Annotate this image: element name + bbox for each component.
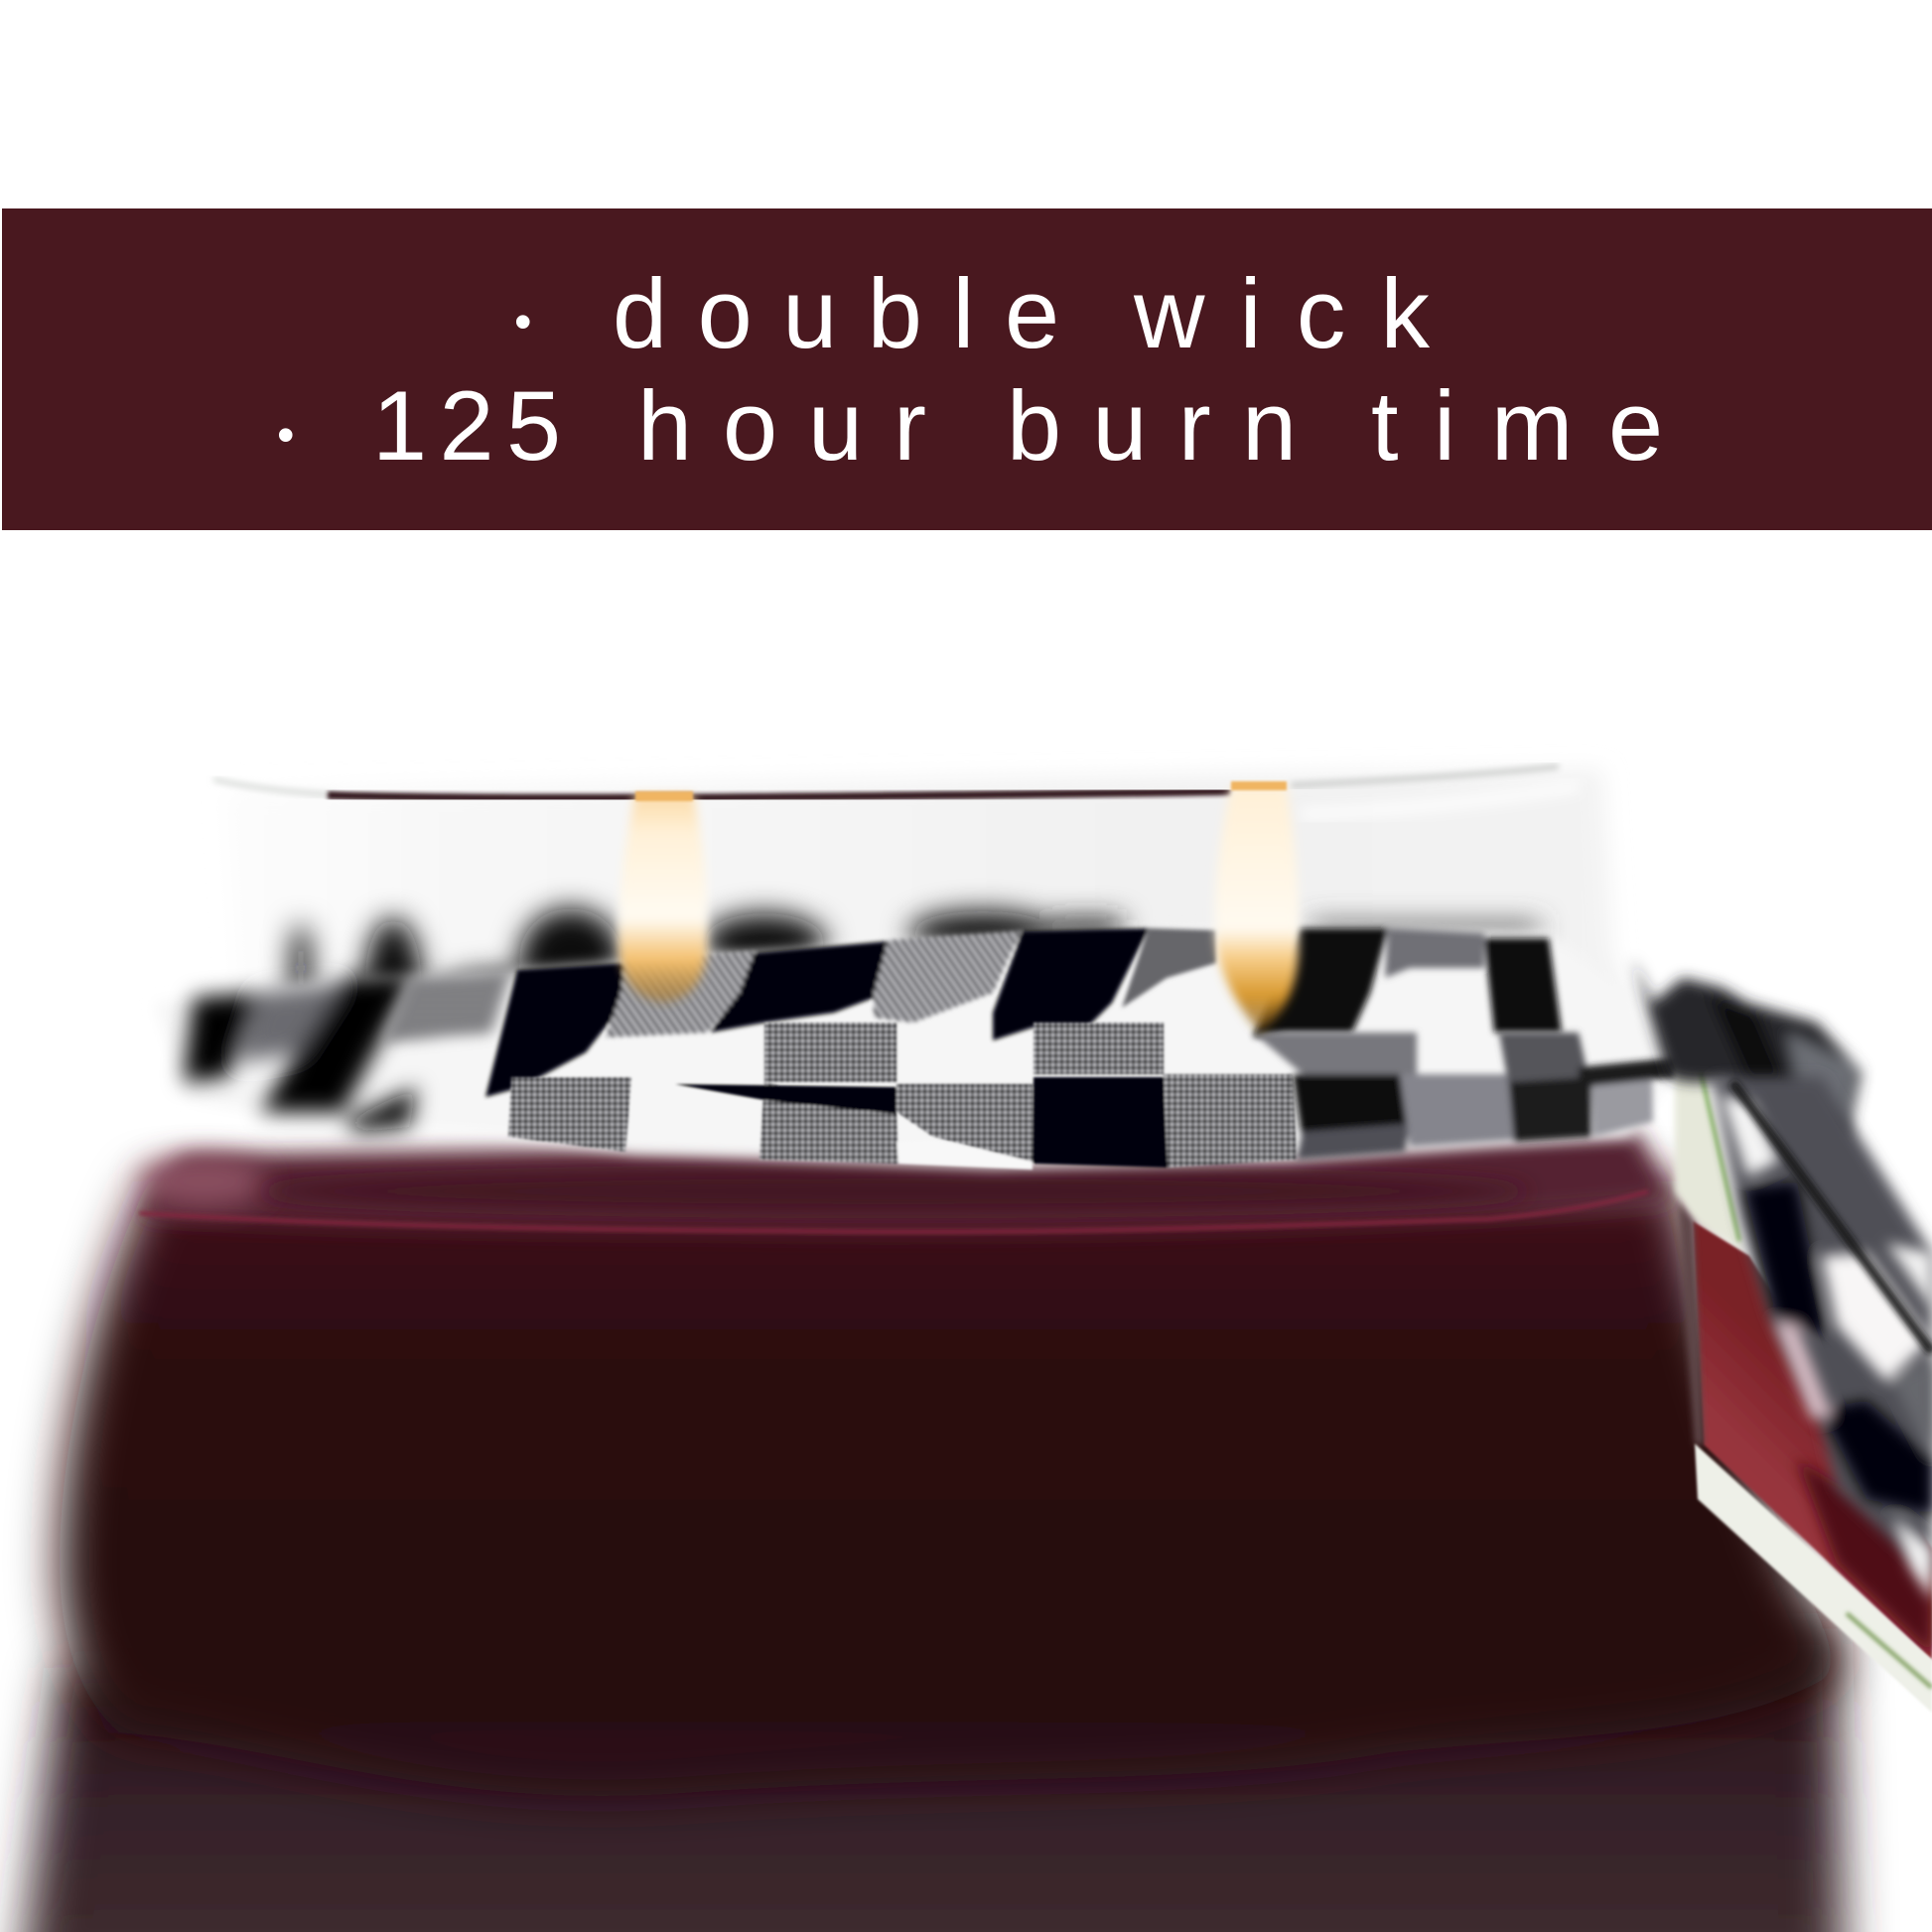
wax body [60, 1181, 1842, 1796]
banner text: double wick: double [613, 258, 1059, 368]
wax top shadow [258, 1172, 1529, 1211]
banner text: 125 hour burn time: 125 [372, 370, 561, 481]
right flame rim glow [1231, 781, 1287, 790]
banner text: 125 hour burn time: • [277, 407, 295, 463]
wax top band [139, 1132, 1673, 1233]
ribbon white base [154, 928, 1668, 1169]
banner text: 125 hour burn time: hour [637, 370, 926, 481]
banner text: 125 hour burn time: burn [1007, 370, 1297, 481]
ribbon tail base [1713, 1077, 1932, 1579]
ribbon right top checks [1253, 928, 1562, 1037]
left flame rim glow [635, 791, 693, 801]
flame: right wick [1215, 781, 1299, 1033]
tag red shadow under ribbon [1797, 1459, 1932, 1656]
banner [2, 208, 1932, 530]
bow and ribbon tails [1633, 958, 1932, 1600]
ribbon [154, 928, 1678, 1170]
tag green edge [1700, 1067, 1739, 1241]
tag upper white strip [1675, 1067, 1744, 1253]
banner background [2, 208, 1932, 530]
glass rim line [213, 766, 1559, 798]
banner text: 125 hour burn time: time [1371, 370, 1663, 481]
tag lower green edge [1847, 1613, 1932, 1688]
ribbon top strip left check [382, 971, 511, 1042]
banner text: double wick: • [514, 294, 532, 349]
dark wick shadows behind glass [291, 908, 1539, 1037]
wax top left highlight [139, 1156, 268, 1207]
ribbon lower row checks [508, 1023, 1297, 1170]
tag gray side edge [1678, 1201, 1704, 1445]
ribbon left blurred checks [184, 973, 417, 1132]
tag lower white strip [1695, 1444, 1932, 1713]
photo: burning double wick candle jar [20, 766, 1932, 1932]
bow knot [1633, 958, 1862, 1142]
flame: left wick [619, 791, 707, 1003]
glass jar upper [223, 769, 1638, 1013]
wax rim highlight [139, 1191, 1648, 1232]
glass reflection band [1301, 786, 1579, 814]
banner text: double wick: wick [1133, 258, 1430, 368]
ribbon top strip checks [485, 928, 1216, 1097]
jar lower section [20, 1628, 1845, 1932]
hanging tag [1675, 1067, 1932, 1713]
tag red panel [1693, 1221, 1932, 1660]
ribbon tail dark stripe [1732, 1082, 1932, 1352]
ribbon tail checks [1721, 1095, 1932, 1600]
ribbon right blurred checks [1253, 1033, 1678, 1160]
